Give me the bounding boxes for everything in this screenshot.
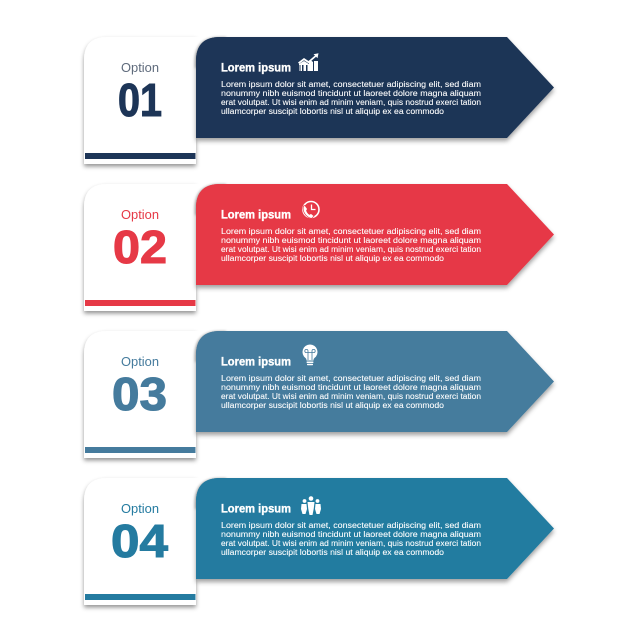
heading: option 3: Lorem ipsum: [221, 354, 291, 368]
accent bar: option 4: [85, 594, 196, 600]
accent bar: option 1: [85, 153, 196, 159]
heading: option 2: Lorem ipsum: [221, 208, 291, 222]
body text: option 3: ullamcorper suscipit lobortis nisl ut aliquip ex ea commodo: [221, 400, 444, 410]
option 4: [84, 478, 554, 605]
card: option 2: [84, 184, 225, 311]
body text: option 4: ullamcorper suscipit lobortis nisl ut aliquip ex ea commodo: [221, 547, 444, 557]
label: option 2: Option: [121, 207, 159, 222]
icon: group of people: [301, 496, 321, 515]
body text: option 1: erat volutpat. Ut wisi enim ad minim veniam, quis nostrud exerci tation: [221, 97, 481, 107]
body text: option 2: ullamcorper suscipit lobortis nisl ut aliquip ex ea commodo: [221, 253, 444, 263]
arrow panel: option 3: [196, 331, 554, 432]
body text: option 1: nonummy nibh euismod tincidunt ut laoreet dolore magna aliquam: [221, 88, 481, 98]
arrow panel: option 4: [196, 478, 554, 579]
label: option 4: Option: [121, 501, 159, 516]
body text: option 4: [221, 520, 481, 557]
body text: option 2: Lorem ipsum dolor sit amet, consectetuer adipiscing elit, sed diam: [221, 226, 481, 236]
heading: option 1: Lorem ipsum: [221, 60, 291, 74]
card: option 1: [84, 37, 225, 164]
accent bar: option 3: [85, 447, 196, 453]
body text: option 4: Lorem ipsum dolor sit amet, consectetuer adipiscing elit, sed diam: [221, 520, 481, 530]
icon: growth chart: [298, 53, 318, 71]
number: 04: 04: [111, 515, 168, 567]
arrow panel: option 1: [196, 37, 554, 138]
number: 01: 01: [118, 74, 162, 126]
body text: option 3: Lorem ipsum dolor sit amet, consectetuer adipiscing elit, sed diam: [221, 373, 481, 383]
option 1: [84, 37, 554, 164]
label: option 3: Option: [121, 354, 159, 369]
option 2: [84, 184, 554, 311]
body text: option 2: erat volutpat. Ut wisi enim ad minim veniam, quis nostrud exerci tation: [221, 244, 481, 254]
body text: option 3: nonummy nibh euismod tincidunt ut laoreet dolore magna aliquam: [221, 382, 481, 392]
body text: option 1: Lorem ipsum dolor sit amet, consectetuer adipiscing elit, sed diam: [221, 79, 481, 89]
number: 02: 02: [113, 221, 167, 273]
accent bar: option 2: [85, 300, 196, 306]
label: option 1: Option: [121, 60, 159, 75]
body text: option 1: [221, 79, 481, 116]
heading: option 4: Lorem ipsum: [221, 502, 291, 516]
body text: option 1: ullamcorper suscipit lobortis nisl ut aliquip ex ea commodo: [221, 106, 444, 116]
body text: option 2: [221, 226, 481, 263]
body text: option 4: erat volutpat. Ut wisi enim ad minim veniam, quis nostrud exerci tation: [221, 538, 481, 548]
icon: phone clock: [303, 202, 319, 218]
option 3: [84, 331, 554, 458]
arrow panel: option 2: [196, 184, 554, 285]
body text: option 3: erat volutpat. Ut wisi enim ad minim veniam, quis nostrud exerci tation: [221, 391, 481, 401]
body text: option 4: nonummy nibh euismod tincidunt ut laoreet dolore magna aliquam: [221, 529, 481, 539]
card: option 4: [84, 478, 225, 605]
body text: option 2: nonummy nibh euismod tincidunt ut laoreet dolore magna aliquam: [221, 235, 481, 245]
number: 03: 03: [112, 368, 167, 420]
icon: light bulb: [302, 344, 318, 365]
card: option 3: [84, 331, 225, 458]
body text: option 3: [221, 373, 481, 410]
